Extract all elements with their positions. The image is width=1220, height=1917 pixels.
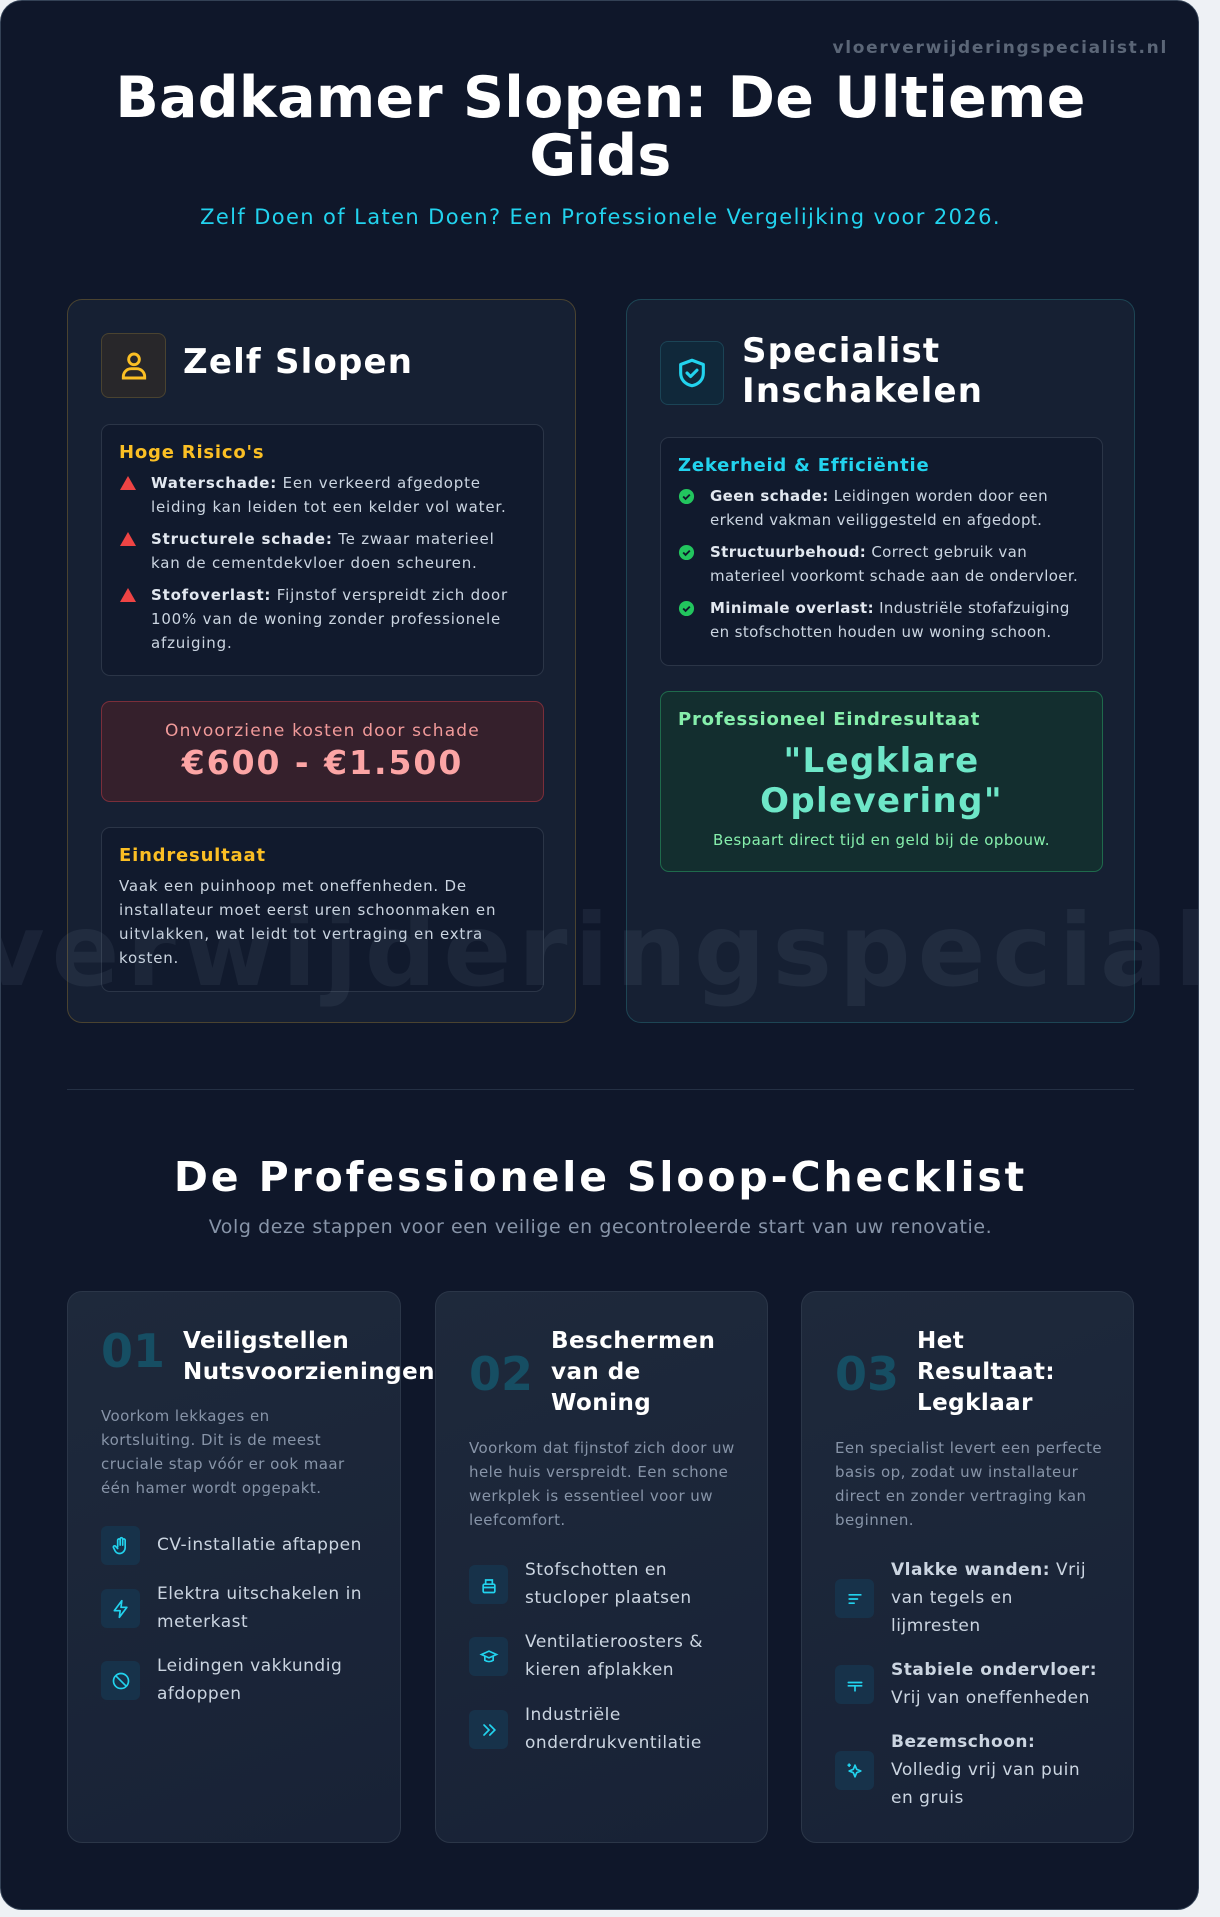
risks box: Stofoverlast: Fijnstof verspreidt zich door 100% van de woning zonder professionele afzuiging. bbox=[151, 586, 508, 652]
step 3: Een specialist levert een perfecte basis op, zodat uw installateur direct en zonder vertraging kan beginnen. bbox=[835, 1439, 1102, 1529]
section subtitle: Volg deze stappen voor een veilige en gecontroleerde start van uw renovatie. bbox=[209, 1216, 992, 1238]
benefits box: Geen schade: Leidingen worden door een erkend vakman veiliggesteld en afgedopt. bbox=[710, 487, 1048, 529]
item: Ventilatieroosters & kieren afplakken bbox=[525, 1632, 703, 1680]
benefits box bbox=[660, 437, 1103, 666]
panel: zelf slopen bbox=[67, 299, 576, 1023]
cost callout: €600 - €1.500 bbox=[182, 743, 463, 782]
heading: Specialist bbox=[742, 331, 940, 371]
risks box: Hoge Risico's bbox=[119, 442, 264, 463]
step 2: Beschermen bbox=[551, 1328, 715, 1354]
step 2: Voorkom dat fijnstof zich door uw hele huis verspreidt. Een schone werkplek is essentieel voor uw leefcomfort. bbox=[469, 1439, 735, 1529]
step 1: Nutsvoorzieningen bbox=[183, 1359, 435, 1385]
cost callout bbox=[101, 701, 544, 802]
risks box: Waterschade: Een verkeerd afgedopte leiding kan leiden tot een kelder vol water. bbox=[151, 474, 507, 516]
result callout: "Legklare bbox=[783, 741, 980, 781]
item: Stabiele ondervloer: Vrij van oneffenheden bbox=[891, 1660, 1097, 1708]
cost callout: Onvoorziene kosten door schade bbox=[165, 721, 480, 741]
title: Gids bbox=[529, 123, 672, 189]
item bbox=[101, 1526, 362, 1565]
end result box bbox=[101, 827, 544, 992]
benefits box: Minimale overlast: Industriële stofafzuiging en stofschotten houden uw woning schoon. bbox=[710, 599, 1070, 641]
subtitle: Zelf Doen of Laten Doen? Een Professionele Vergelijking voor 2026. bbox=[200, 205, 1001, 229]
section title: De Professionele Sloop-Checklist bbox=[174, 1153, 1027, 1201]
item: Leidingen vakkundig afdoppen bbox=[157, 1656, 342, 1704]
item: Stofschotten en stucloper plaatsen bbox=[525, 1560, 692, 1608]
step 1: Voorkom lekkages en kortsluiting. Dit is de meest cruciale stap vóór er ook maar één hamer wordt opgepakt. bbox=[101, 1407, 345, 1497]
step 1: 01 bbox=[101, 1324, 165, 1378]
title: Badkamer Slopen: De Ultieme bbox=[115, 65, 1086, 131]
title bbox=[115, 65, 1086, 189]
item: Bezemschoon: Volledig vrij van puin en gruis bbox=[891, 1732, 1080, 1808]
step 2: van de bbox=[551, 1359, 641, 1385]
end result box: Eindresultaat bbox=[119, 845, 266, 866]
step 3 bbox=[801, 1291, 1134, 1843]
icon: shield bbox=[660, 341, 724, 405]
result callout bbox=[660, 691, 1103, 872]
step 3: 03 bbox=[835, 1347, 899, 1401]
heading: Zelf Slopen bbox=[183, 342, 413, 382]
step 3: Het bbox=[917, 1328, 964, 1354]
item: Elektra uitschakelen in meterkast bbox=[157, 1584, 362, 1632]
end result box: Vaak een puinhoop met oneffenheden. De installateur moet eerst uren schoonmaken en uitvlakken, wat leidt tot vertraging en extra kosten. bbox=[119, 877, 496, 967]
icon: person bbox=[101, 333, 166, 398]
step 1 bbox=[67, 1291, 401, 1843]
step 3: Resultaat: bbox=[917, 1359, 1055, 1385]
heading: Inschakelen bbox=[742, 371, 983, 411]
result callout: Bespaart direct tijd en geld bij de opbouw. bbox=[713, 831, 1050, 849]
item: Industriële onderdrukventilatie bbox=[525, 1705, 702, 1753]
item: CV-installatie aftappen bbox=[157, 1535, 362, 1555]
result callout: Professioneel Eindresultaat bbox=[678, 709, 980, 730]
step 2: Woning bbox=[551, 1390, 651, 1416]
panel: specialist bbox=[626, 299, 1135, 1023]
benefits box: Structuurbehoud: Correct gebruik van materieel voorkomt schade aan de ondervloer. bbox=[710, 543, 1078, 585]
risks box bbox=[101, 424, 544, 676]
domain label: vloerverwijderingspecialist.nl bbox=[832, 38, 1168, 58]
step 2: 02 bbox=[469, 1347, 533, 1401]
step 2 bbox=[435, 1291, 768, 1843]
item: Vlakke wanden: Vrij van tegels en lijmresten bbox=[891, 1560, 1086, 1636]
risks box: Structurele schade: Te zwaar materieel kan de cementdekvloer doen scheuren. bbox=[151, 530, 495, 572]
step 1: Veiligstellen bbox=[183, 1328, 349, 1354]
result callout: Oplevering" bbox=[760, 781, 1003, 821]
step 3: Legklaar bbox=[917, 1390, 1033, 1416]
heading bbox=[742, 331, 983, 411]
benefits box: Zekerheid & Efficiëntie bbox=[678, 455, 930, 476]
